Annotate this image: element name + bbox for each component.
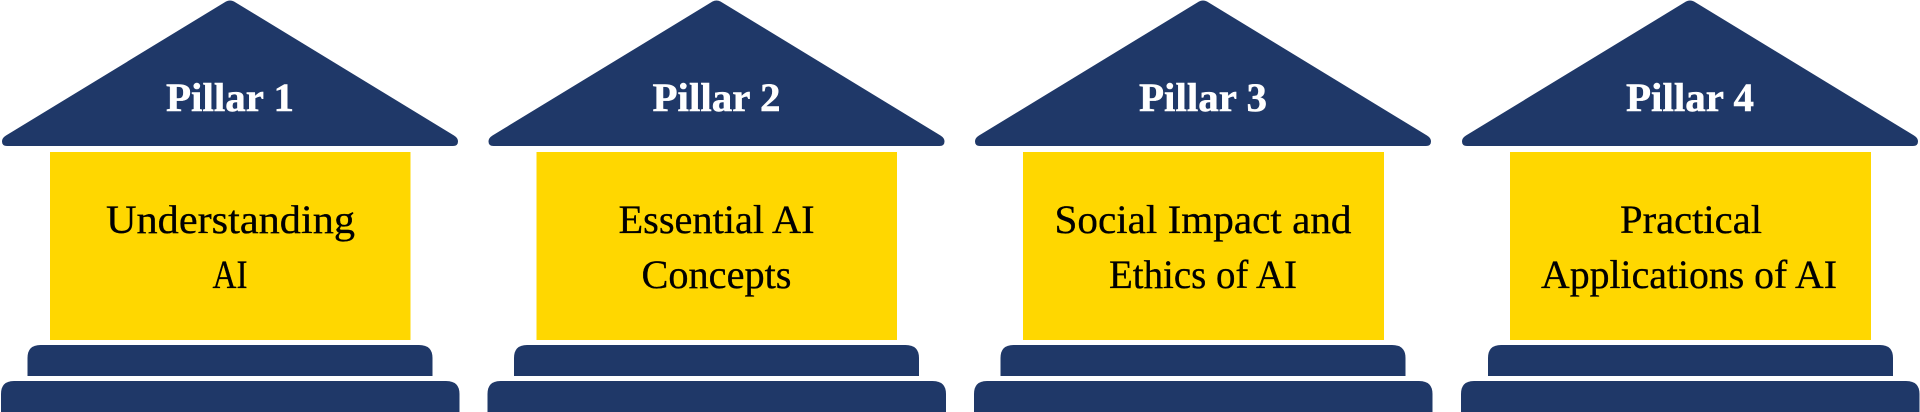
column: yellow panel — [1023, 152, 1384, 340]
panel: pillar 1 — [1, 0, 460, 412]
heading: Pillar 2: Pillar 2 — [652, 75, 780, 120]
text: pillar 3 topic: Ethics of AI — [1109, 252, 1297, 297]
heading: Pillar 1: Pillar 1 — [166, 75, 294, 120]
text: pillar 1 topic: Understanding — [106, 197, 355, 242]
roof: pillar 1 — [2, 0, 458, 146]
text: pillar 2 topic: Essential AI — [618, 197, 814, 242]
upper step — [514, 345, 919, 376]
upper step — [1488, 345, 1893, 376]
upper step — [28, 345, 432, 376]
heading: Pillar 3: Pillar 3 — [1139, 75, 1267, 120]
roof: pillar 4 — [1462, 0, 1918, 146]
lower step — [974, 381, 1432, 412]
column: yellow panel — [50, 152, 410, 340]
text: pillar 1 topic — [106, 197, 355, 297]
roof: pillar 3 — [975, 0, 1431, 146]
text: pillar 3 topic — [1054, 197, 1352, 297]
column: yellow panel — [1510, 152, 1871, 340]
upper step — [1000, 345, 1406, 376]
lower step — [488, 381, 946, 412]
text: pillar 1 topic: AI — [212, 252, 248, 297]
panel: pillar 2 — [488, 0, 946, 412]
text: pillar 4 topic — [1541, 197, 1837, 297]
column: yellow panel — [536, 152, 897, 340]
text: pillar 2 topic: Concepts — [642, 252, 792, 297]
text: pillar 4 topic: Applications of AI — [1541, 252, 1837, 297]
heading: Pillar 4: Pillar 4 — [1626, 75, 1754, 120]
text: pillar 3 topic: Social Impact and — [1054, 197, 1352, 242]
lower step — [1, 381, 460, 412]
panel: pillar 4 — [1461, 0, 1920, 412]
panel: pillar 3 — [974, 0, 1432, 412]
lower step — [1461, 381, 1920, 412]
text: pillar 4 topic: Practical — [1620, 197, 1762, 242]
text: pillar 2 topic — [618, 197, 814, 297]
roof: pillar 2 — [488, 0, 944, 146]
